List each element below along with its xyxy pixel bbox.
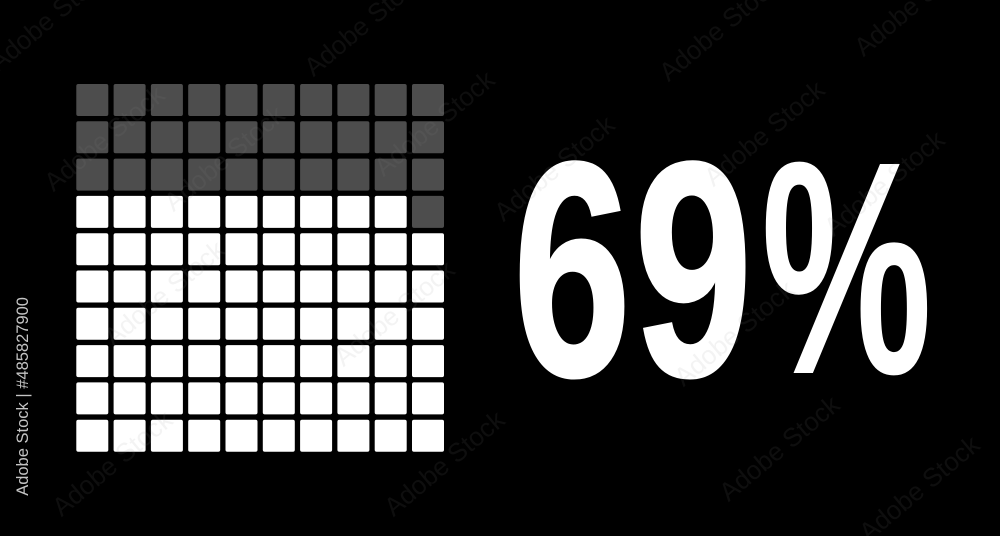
watermark pattern: Adobe Stock [488, 109, 621, 227]
watermark pattern: Adobe Stock [158, 99, 291, 217]
digit 9: 9 [634, 98, 753, 440]
filled squares (69) [76, 196, 444, 452]
watermark pattern: Adobe Stock [38, 79, 171, 197]
watermark pattern: Adobe Stock [328, 254, 461, 372]
digit 6: 6 [513, 98, 631, 440]
watermark pattern: Adobe Stock [378, 404, 511, 522]
percent sign: % [761, 98, 932, 438]
stock id, vertical text: Adobe Stock | #485827900 [14, 297, 32, 496]
watermark pattern: Adobe Stock [368, 64, 501, 182]
percentage value: 69% [513, 98, 932, 440]
watermark pattern: Adobe Stock [713, 389, 846, 507]
watermark pattern: Adobe Stock [698, 74, 831, 192]
unfilled squares (31) [76, 84, 444, 228]
waffle chart: 69 of 100 squares filled [76, 84, 444, 452]
watermark pattern: Adobe Stock [46, 404, 179, 522]
watermark pattern: Adobe Stock [98, 234, 231, 352]
watermark pattern: Adobe Stock [668, 274, 801, 392]
watermark pattern: Adobe Stock [818, 124, 951, 242]
